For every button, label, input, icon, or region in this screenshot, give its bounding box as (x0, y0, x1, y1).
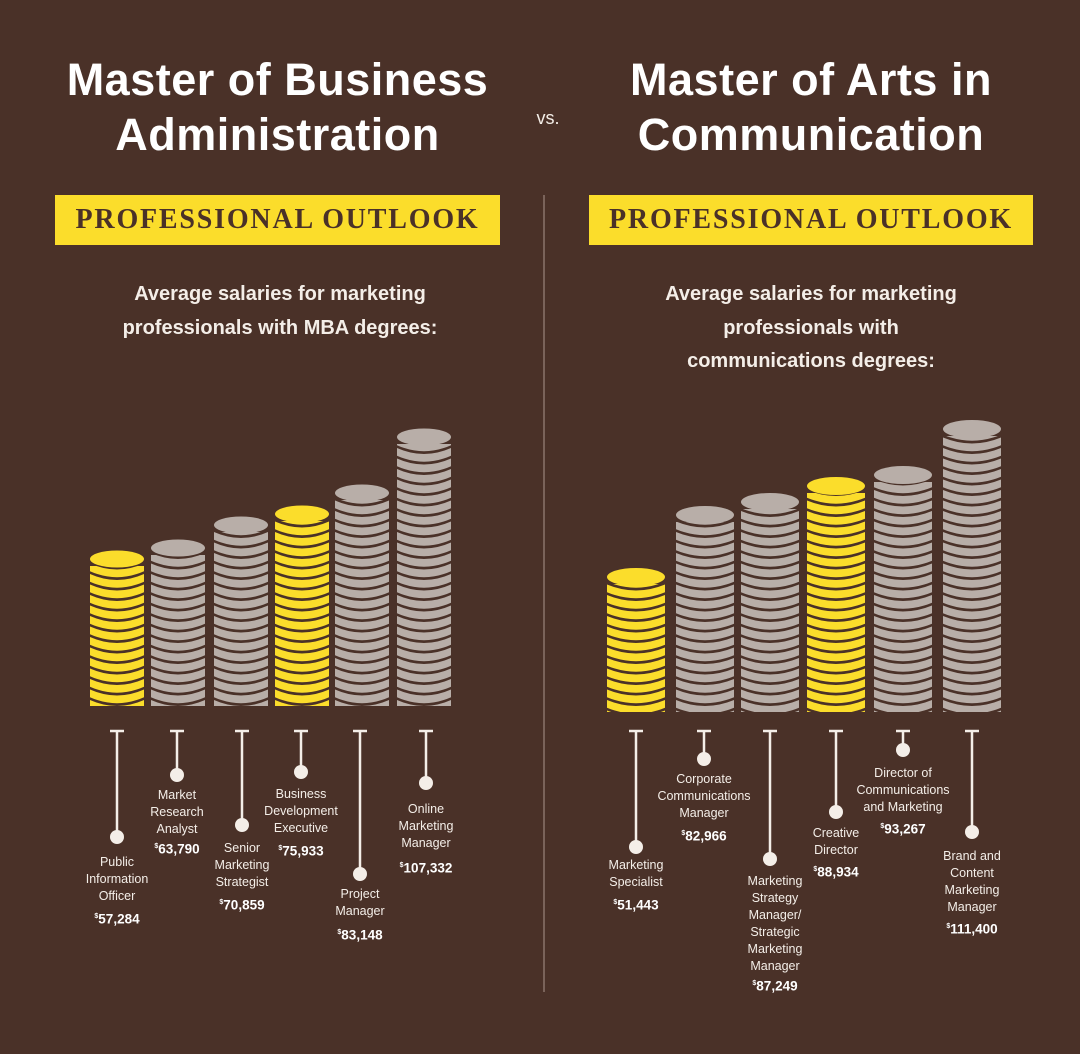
text: Senior (224, 841, 260, 855)
title: MBA: Administration (115, 109, 440, 160)
text: $70,859 (219, 898, 265, 912)
subtitle right: professionals with (723, 316, 899, 338)
divider (543, 195, 545, 992)
title: MA Communication (630, 54, 992, 160)
text: $111,400 (946, 922, 998, 936)
text: $107,332 (400, 860, 452, 876)
title: MBA: Master of Business (67, 54, 488, 105)
text: Marketing (215, 858, 269, 872)
text: Marketing (748, 942, 802, 956)
text: and Marketing (863, 800, 943, 814)
text: Strategist (216, 875, 268, 889)
labels left: Information (86, 872, 148, 886)
text: Manager (947, 900, 997, 914)
text: Research (150, 805, 204, 819)
subtitle right: communications degrees: (687, 350, 935, 372)
text: $82,966 (681, 828, 727, 844)
right coin stacks (607, 420, 1001, 712)
text: $83,148 (337, 928, 383, 942)
text: Analyst (156, 822, 198, 836)
banner right (589, 195, 1033, 245)
subtitle left (123, 283, 437, 338)
text: Content (950, 866, 994, 880)
text: Market (158, 788, 196, 802)
vs label: vs. (536, 108, 560, 128)
text: $87,249 (752, 978, 798, 994)
text: Director of (874, 766, 932, 780)
text: Manager (679, 806, 729, 820)
text: $57,284 (94, 912, 140, 926)
text: Strategy (752, 891, 798, 905)
labels right: Specialist (609, 875, 663, 889)
left coin stacks (90, 428, 451, 706)
subtitle right: Average salaries for marketing (665, 283, 957, 305)
text: Manager/ (749, 908, 801, 922)
banner left (55, 195, 500, 245)
text: Marketing (748, 874, 802, 888)
subtitle left: Average salaries for marketing (134, 283, 426, 305)
subtitle left: professionals with MBA degrees: (123, 316, 437, 338)
text: $75,933 (278, 844, 324, 858)
text: Business (276, 787, 326, 801)
labels left: Officer (99, 889, 135, 903)
text: Communications (657, 789, 751, 803)
text: Creative (813, 826, 859, 840)
banner left: PROFESSIONAL OUTLOOK (76, 204, 479, 235)
text: Manager (335, 904, 385, 918)
title: MBA (67, 54, 488, 160)
text: Online (408, 802, 444, 816)
text: Project (341, 887, 379, 901)
text: Director (814, 843, 858, 857)
text: Marketing (945, 883, 999, 897)
pointer lines (110, 731, 979, 881)
labels right (609, 858, 663, 889)
title: MA Communication: Communication (638, 109, 984, 160)
labels left: Public (100, 855, 134, 869)
text: Development (264, 804, 338, 818)
banner right: PROFESSIONAL OUTLOOK (609, 204, 1013, 235)
text: $51,443 (613, 898, 659, 912)
text: $63,790 (154, 842, 200, 856)
text: Executive (274, 821, 328, 835)
text: Corporate (676, 772, 732, 786)
text: Communications (856, 783, 950, 797)
labels left (86, 855, 148, 903)
subtitle right (665, 283, 957, 372)
text: Manager (401, 836, 451, 850)
text: Marketing (399, 819, 453, 833)
text: $88,934 (813, 864, 859, 880)
text: Strategic (750, 925, 800, 939)
title: MA Communication: Master of Arts in (630, 54, 992, 105)
text: $93,267 (880, 822, 926, 836)
text: Manager (750, 959, 800, 973)
labels right: Marketing (609, 858, 663, 872)
text: Brand and (943, 849, 1001, 863)
